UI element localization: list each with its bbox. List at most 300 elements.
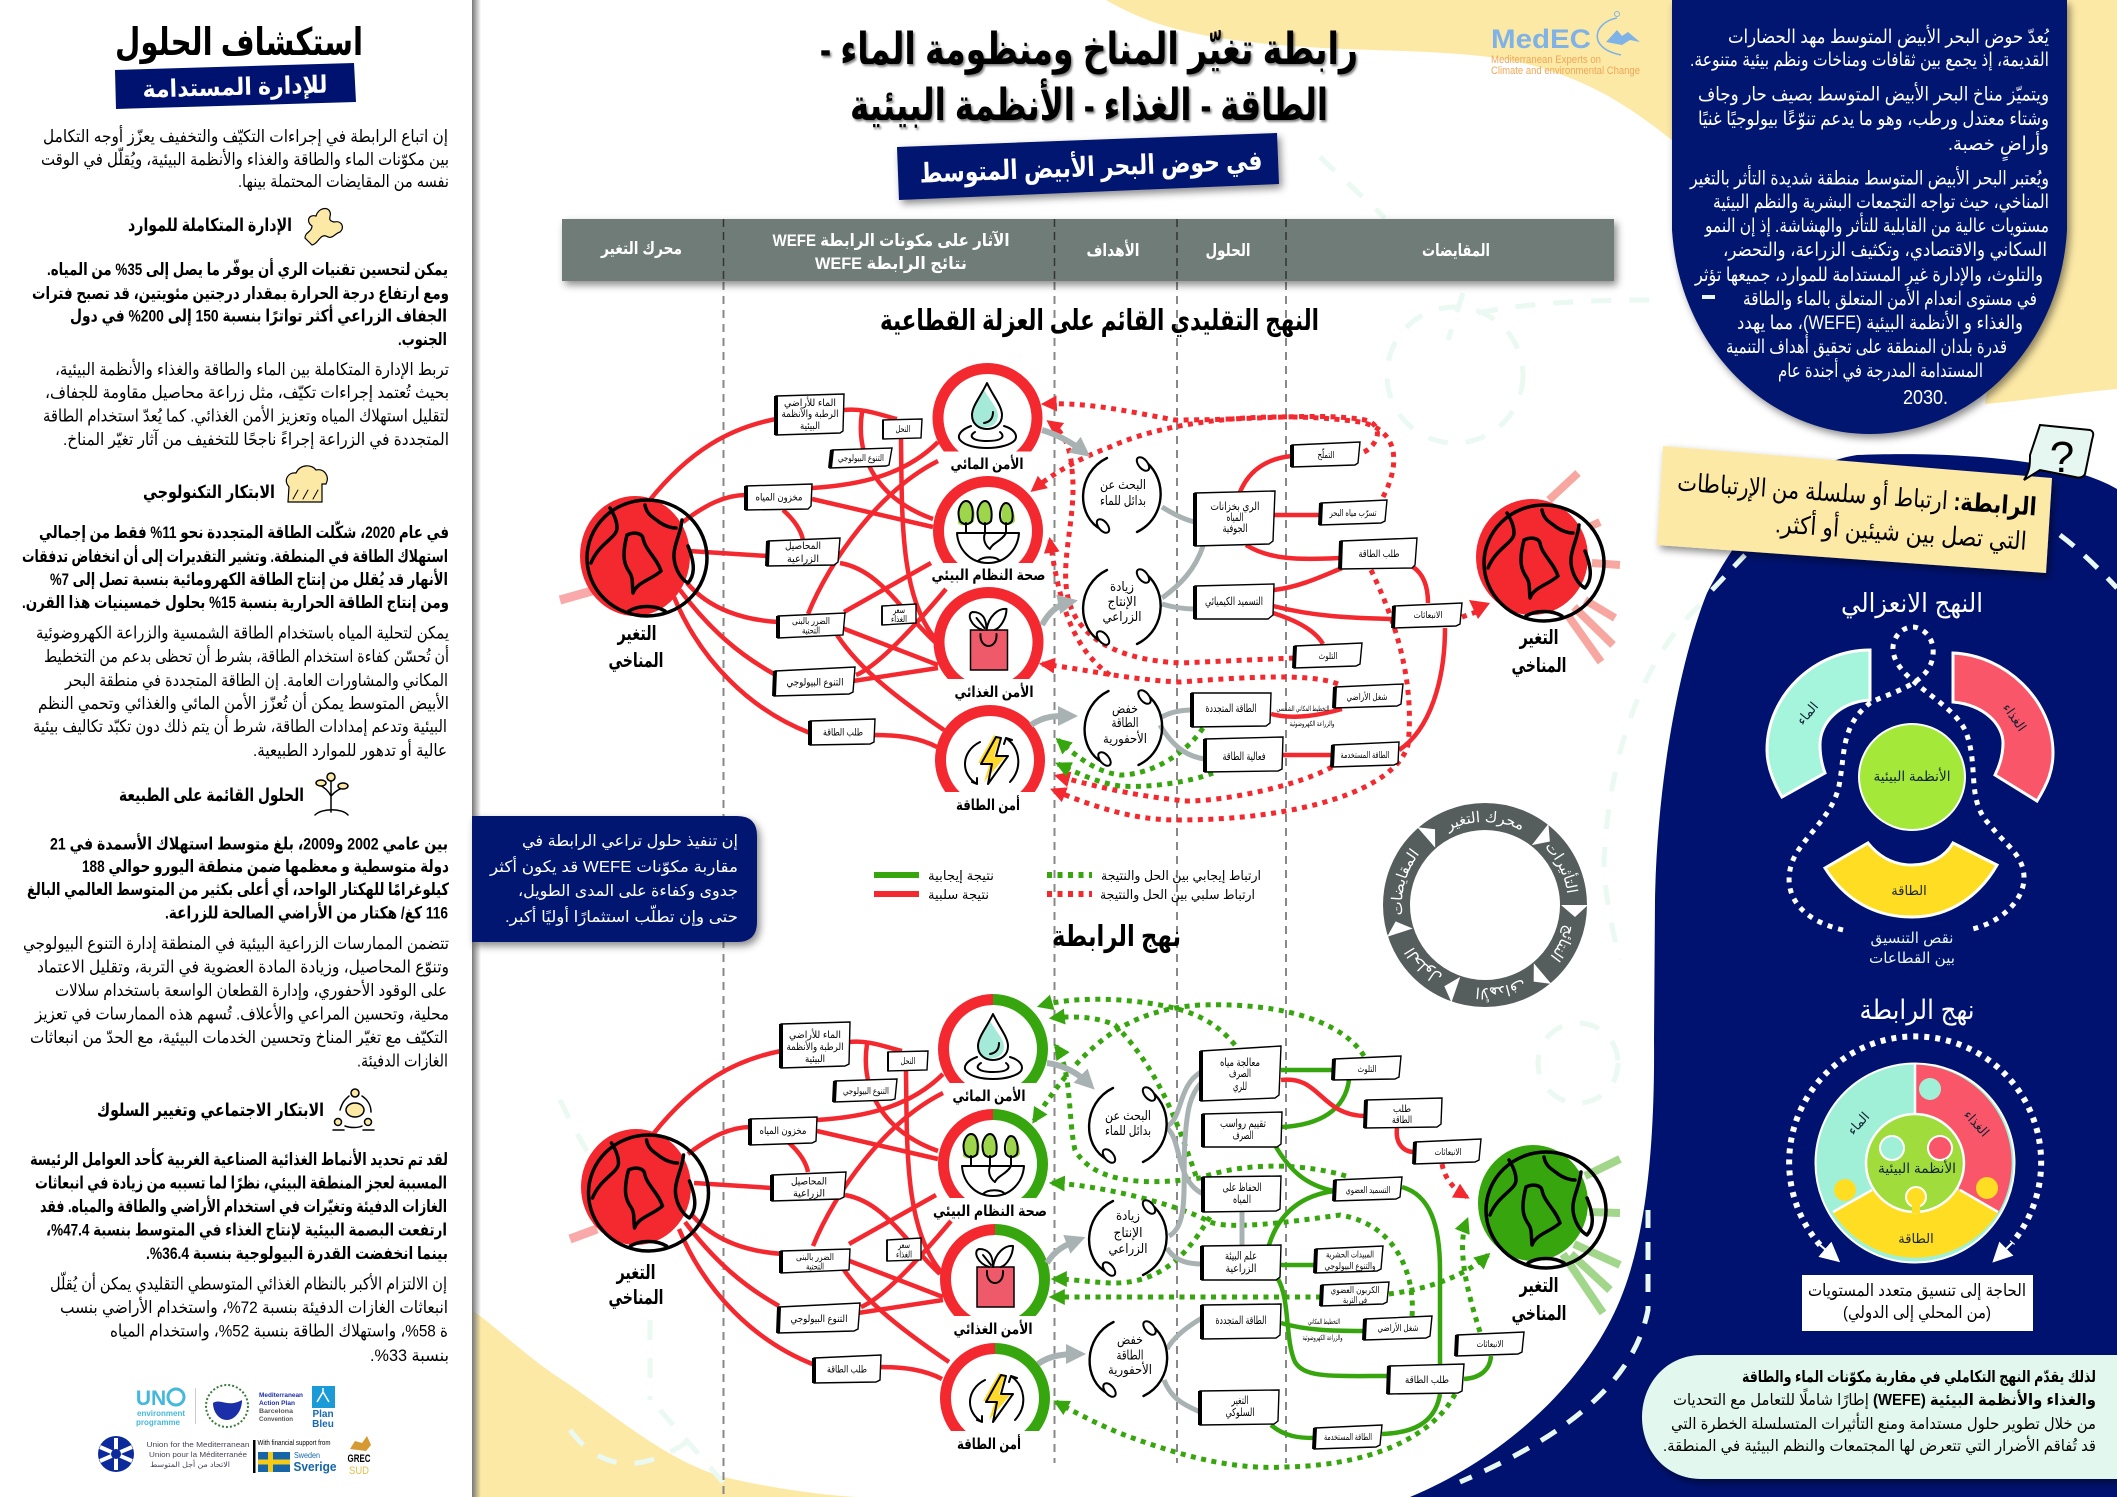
nexus: trade-off boxes: التلوث bbox=[1358, 1064, 1376, 1074]
text block: social innovation bbox=[30, 1148, 449, 1365]
panel: Mediterranean intro: يُعدّ حوض البحر الأبيض المتوسط مهد الحضارات bbox=[1728, 25, 2050, 48]
panel: conclusion: من خلال تطوير حلول مستدامة ومنع التأثيرات المتسلسلة الخطرة التي bbox=[1671, 1412, 2096, 1434]
text block: nature based solutions: التكيّف مع تغيّر المناخ وتحسين الخدمات البيئية، مع الحدّ من انبعاثات bbox=[30, 1028, 448, 1048]
diagram: nexus puzzle: الأنظمة البيئية bbox=[1878, 1159, 1956, 1176]
text block: integrated management: يمكن لتحسين تقنيات الري أن يوفّر ما يصل إلى 35% من المياه. bbox=[47, 258, 448, 280]
conventional: energy security bbox=[940, 710, 1040, 814]
conventional: impact boxes: الزراعية bbox=[787, 554, 819, 565]
nexus: trade-off boxes: طلب الطاقة bbox=[1405, 1375, 1449, 1386]
text block: nature based solutions bbox=[23, 834, 449, 1070]
text block: integrated management: المتجددة في الزراعة إجراءً ناجحًا للتخفيف من آثار تغيّر المناخ. bbox=[63, 428, 449, 450]
logo: Mediterranean Action Plan: Barcelona bbox=[259, 1408, 293, 1415]
text block: technological innovation: الأبيض المتوسط يمكن أن تُعزّز الأمن المائي والغذائي وتحمي النظم bbox=[38, 692, 449, 714]
conventional: trade-off boxes: التملّح bbox=[1318, 448, 1334, 460]
logo: Plan Bleu: Plan bbox=[312, 1409, 334, 1420]
text block: nature based solutions: كيلوغرامًا للهكتار الواحد، أي أعلى بكثير من المتوسط العالمي البالغ bbox=[27, 878, 449, 900]
conventional: ecosystem health bbox=[932, 482, 1046, 584]
heading: conventional approach: النهج التقليدي القائم على العزلة القطاعية bbox=[880, 305, 1319, 337]
title: الطاقة - الغذاء - الأنظمة البيئية bbox=[850, 78, 1328, 130]
nexus: solution boxes: الزراعية bbox=[1226, 1263, 1256, 1275]
nexus: trade-off boxes: التسميد العضوي bbox=[1346, 1185, 1390, 1195]
conventional: trade-off boxes: التلوث bbox=[1318, 651, 1338, 661]
diagram: nexus puzzle bbox=[1789, 1036, 2041, 1262]
header band bbox=[562, 219, 1614, 281]
cycle ring: الحلول bbox=[1404, 948, 1442, 982]
cycle ring bbox=[1383, 803, 1587, 1007]
header band: نتائج الرابطة WEFE bbox=[815, 254, 967, 274]
conventional: impact boxes: سعر bbox=[892, 605, 905, 615]
diagram: siloed approach: الطاقة bbox=[1891, 883, 1927, 898]
callout: multi-level coordination: (من المحلي إلى الدولي) bbox=[1843, 1303, 1991, 1323]
logo: MedEC: MedEC bbox=[1491, 24, 1591, 54]
nexus: impact boxes: التنوع البيولوجي bbox=[843, 1086, 889, 1096]
panel: conclusion bbox=[1642, 1355, 2117, 1479]
cycle ring: الأهداف bbox=[1476, 980, 1524, 1002]
diagram: siloed approach: الأنظمة البيئية bbox=[1874, 767, 1950, 784]
nexus: goal search for water alternatives: البحث عن bbox=[1105, 1108, 1151, 1124]
icon: question bubble: ? bbox=[2050, 433, 2074, 482]
panel: Mediterranean intro: مستويات عالية من القابلية للتأثر والهشاشة. إذ إن النمو bbox=[1704, 212, 2049, 238]
text block: technological innovation: عالية أو تدهور للموارد الطبيعية. bbox=[253, 739, 447, 760]
intro paragraph: إن اتباع الرابطة في إجراءات التكيّف والتخفيف يعزّز أوجه التكامل bbox=[43, 125, 448, 147]
nexus: trade-off boxes: الانبعاثات bbox=[1434, 1147, 1462, 1157]
nexus: impact boxes: طلب الطاقة bbox=[827, 1364, 867, 1376]
conventional: ecosystem health: صحة النظام البيئي bbox=[932, 567, 1046, 584]
conventional: goal reduce fossil energy: خفض bbox=[1112, 701, 1138, 717]
logo: Union for the Mediterranean: Union pour la Méditerranée bbox=[149, 1450, 247, 1459]
callout: nexus solutions: جدوى وكفاءة على المدى الطويل، bbox=[518, 883, 738, 901]
intro paragraph: نفسه من المقايضات المحتملة بينها. bbox=[238, 172, 449, 192]
heading: nexus approach: نهج الرابطة bbox=[1052, 921, 1181, 953]
text block: integrated management: بحيث تُعتمد إجراءات تكيّف، مثل زراعة محاصيل مقاومة للجفاف، bbox=[45, 383, 449, 402]
legend: ارتباط سلبي بين الحل والنتيجة bbox=[1100, 887, 1255, 903]
panel: Mediterranean intro: ويُعتبر البحر الأبيض المتوسط منطقة شديدة التأثر بالتغير bbox=[1689, 164, 2049, 190]
nexus: trade-off boxes: الكربون العضوي bbox=[1330, 1285, 1380, 1295]
text block: social innovation: إن الالتزام الأكبر بالنظام الغذائي المتوسطي التقليدي يمكن أن يُقلّل bbox=[50, 1271, 447, 1294]
conventional: left globe bbox=[560, 496, 707, 673]
nexus: impact boxes: الماء للأراضي bbox=[789, 1028, 841, 1041]
header band: الآثار على مكونات الرابطة WEFE bbox=[772, 230, 1010, 251]
logo: MedEC: Climate and environmental Change bbox=[1491, 65, 1640, 77]
intro paragraph: بين مكوّنات الماء والطاقة والغذاء والأنظمة البيئية، ويُقلّل في الوقت bbox=[41, 146, 449, 170]
text block: social innovation: انبعاثات الغازات الدفيئة بنسبة 72%، واستخدام الأراضي بنسب bbox=[60, 1297, 448, 1318]
logo: UN environment: environment bbox=[137, 1409, 185, 1418]
caption: lack of coordination: بين القطاعات bbox=[1869, 950, 1955, 967]
conventional: left globe: المناخي bbox=[608, 650, 664, 673]
nexus: left globe: المناخي bbox=[608, 1287, 664, 1310]
text block: technological innovation: يمكن لتحلية المياه باستخدام الطاقة الشمسية والزراعة الكهروضوئية bbox=[36, 624, 449, 644]
nexus: goal increase agricultural production: الزراعي bbox=[1108, 1241, 1148, 1257]
conventional: gray arrows bbox=[1031, 430, 1084, 725]
logo: Mediterranean Action Plan: Action Plan bbox=[259, 1400, 295, 1407]
nexus: solution boxes: الصرف bbox=[1232, 1130, 1254, 1142]
panel: Mediterranean intro: قدرة بلدان المنطقة على تحقيق أهداف التنمية bbox=[1726, 334, 2007, 358]
nexus: solution boxes: الصرف bbox=[1229, 1068, 1251, 1080]
nexus: left globe bbox=[570, 1129, 708, 1310]
conventional: goal search for water alternatives bbox=[1083, 455, 1161, 535]
panel: Mediterranean intro: المناخي، حيث تواجه التجمعات البشرية والنظم البيئية bbox=[1713, 192, 2049, 213]
heading: explore solutions: استكشاف الحلول bbox=[115, 22, 363, 64]
nexus: impact boxes: سعر bbox=[897, 1240, 910, 1250]
nexus: impact boxes: التحتية bbox=[806, 1262, 824, 1272]
text block: technological innovation: أن تُحسّن كفاءة استخدام الطاقة، بشرط أن تحظى بدعم من التخطيط bbox=[44, 645, 449, 667]
conventional: goal increase agricultural production bbox=[1083, 567, 1161, 647]
panel: Mediterranean intro: وأراضٍ خصبة. bbox=[1948, 131, 2049, 161]
nexus: gray goal to solution links bbox=[1164, 1072, 1242, 1412]
callout: nexus definition: الرابطة: ارتباط أو سلسلة من الإرتباطات bbox=[1676, 464, 2038, 523]
conventional: trade-off boxes: طلب الطاقة bbox=[1358, 549, 1400, 560]
nexus: impact boxes bbox=[750, 1022, 928, 1383]
heading: social innovation: الابتكار الاجتماعي وتغيير السلوك bbox=[97, 1100, 324, 1121]
panel: Mediterranean intro bbox=[1672, 0, 2067, 434]
heading: nature based solutions: الحلول القائمة على الطبيعة bbox=[119, 785, 304, 806]
nexus: negative trade-off links bbox=[1281, 1080, 1414, 1152]
logo: Union for the Mediterranean: الاتحاد من أجل المتوسط bbox=[150, 1459, 230, 1469]
conventional: left globe: التغير bbox=[617, 623, 656, 645]
nexus: trade-off boxes: المبيدات الحشرية bbox=[1326, 1250, 1374, 1260]
conventional: solution boxes bbox=[1192, 491, 1283, 772]
text block: integrated management bbox=[32, 258, 449, 450]
nexus: impact boxes: البيئية bbox=[805, 1054, 825, 1065]
header band: محرك التغير bbox=[600, 239, 682, 259]
heading: integrated resource management: الإدارة المتكاملة للموارد bbox=[128, 215, 292, 236]
cycle ring: النتائج bbox=[1550, 926, 1572, 962]
conventional: impact boxes: مخزون المياه bbox=[756, 492, 802, 504]
nexus: trade-off boxes: والتنوع البيولوجي bbox=[1324, 1261, 1376, 1271]
conventional: trade-off boxes bbox=[1292, 442, 1462, 767]
nexus: impact boxes: المحاصيل bbox=[791, 1176, 827, 1188]
conventional: trade-off boxes: تسرّب مياه البحر bbox=[1329, 508, 1377, 518]
text block: technological innovation: استهلاك الطاقة في المنطقة. وتشير التقديرات إلى أن انخفاض تدفقات bbox=[22, 545, 448, 567]
conventional: food security: الأمن الغذائي bbox=[954, 683, 1034, 701]
logo: Sweden Sverige: Sverige bbox=[294, 1459, 336, 1474]
text block: social innovation: لقد تم تحديد الأنماط الغذائية الصناعية الغربية كأحد العوامل الرئيسة bbox=[30, 1148, 448, 1170]
callout: nexus solutions: إن تنفيذ حلول تراعي الرابطة في bbox=[522, 833, 738, 851]
nexus: impact boxes: التنوع البيولوجي bbox=[790, 1314, 848, 1325]
nexus: right globe: المناخي bbox=[1512, 1303, 1566, 1326]
nexus: trade-off links bbox=[1269, 1070, 1491, 1438]
nexus: energy security bbox=[946, 1348, 1044, 1453]
title bbox=[820, 25, 1358, 130]
nexus: impact boxes: النحل bbox=[900, 1056, 916, 1066]
text block: social innovation: ة 58%، واستهلاك الطاقة بنسبة 52%، واستخدام المياه bbox=[110, 1322, 448, 1342]
nexus: solution boxes: علم البيئة bbox=[1225, 1250, 1257, 1262]
nexus: trade-off boxes: طلب bbox=[1393, 1104, 1411, 1115]
conventional: trade-off boxes: الانبعاثات bbox=[1414, 610, 1442, 620]
nexus: goal reduce fossil energy: الطاقة bbox=[1116, 1348, 1144, 1362]
nexus: solution boxes: الطاقة المتجددة bbox=[1216, 1315, 1266, 1327]
panel: left text column bbox=[0, 0, 481, 1497]
logo: MedEC bbox=[1491, 12, 1640, 77]
nexus: trade-off boxes: الانبعاثات bbox=[1476, 1339, 1504, 1349]
nexus: water security: الأمن المائي bbox=[952, 1087, 1026, 1105]
conventional: small note on spatial planning: التخطيط المكاني الشمسي bbox=[1276, 705, 1330, 713]
cycle ring: المقايضات bbox=[1390, 848, 1419, 914]
text block: nature based solutions: دولة متوسطية و معظمها ضمن منطقة اليورو حوالي 188 bbox=[82, 857, 449, 877]
icon: people cycle bbox=[333, 1089, 374, 1130]
legend: ارتباط إيجابي بين الحل والنتيجة bbox=[1101, 868, 1261, 884]
conventional: goal reduce fossil energy: الطاقة bbox=[1112, 715, 1138, 730]
nexus: impact boxes: الضرر بالبنى bbox=[796, 1252, 834, 1262]
nexus: ecosystem health: صحة النظام البيئي bbox=[933, 1203, 1047, 1220]
text block: nature based solutions: تتضمن الممارسات الزراعية البيئية في المنطقة إدارة التنوع البيولوجي bbox=[23, 934, 449, 954]
text block: nature based solutions: وتنوّع المحاصيل، وزيادة المادة العضوية في التربة، وتقليل الاعتماد bbox=[37, 958, 449, 978]
nexus: trade-off boxes bbox=[1314, 1056, 1524, 1449]
text block: nature based solutions: بين عامي 2002 و2009، بلغ متوسط استهلاك الأسمدة في 21 bbox=[50, 834, 448, 854]
diagram: nexus puzzle: الغذاء bbox=[1961, 1107, 1992, 1140]
conventional: goal increase agricultural production: زيادة bbox=[1110, 579, 1134, 595]
conventional: water security bbox=[938, 368, 1037, 473]
diagram: siloed approach bbox=[1767, 627, 2053, 930]
conventional: right globe bbox=[1476, 473, 1620, 678]
nexus: solution boxes: الحفاظ على bbox=[1222, 1182, 1262, 1194]
text block: integrated management: لتقليل استهلاك المياه وتعزيز الأمن الغذائي. كما يُعدّ استخدام الطاقة bbox=[43, 406, 449, 426]
callout: nexus solutions: حتى وإن تطلّب استثمارًا أوليًا أكبر. bbox=[505, 903, 738, 927]
logo: Union for the Mediterranean: Union for the Mediterranean bbox=[146, 1440, 250, 1449]
callout: nexus solutions bbox=[472, 816, 757, 942]
logo: Sweden Sverige bbox=[253, 1440, 336, 1474]
subtitle banner: في حوض البحر الأبيض المتوسط bbox=[919, 143, 1263, 190]
logo: Union for the Mediterranean bbox=[98, 1436, 250, 1472]
nexus: gray arrows bbox=[1038, 1063, 1089, 1364]
icon: sprout bbox=[315, 773, 348, 815]
conventional: solution boxes: الطاقة المتجددة bbox=[1206, 703, 1256, 715]
callout: multi-level coordination bbox=[1802, 1275, 2033, 1331]
text block: nature based solutions: 116 كغ/ هكتار من الأراضي الصالحة للزراعة. bbox=[165, 902, 448, 924]
cycle ring: التأثيرات bbox=[1546, 845, 1579, 893]
conventional: goal search for water alternatives: بدائل للماء bbox=[1100, 493, 1146, 508]
diagram: nexus puzzle: الماء bbox=[1844, 1109, 1872, 1138]
conventional: small note on spatial planning bbox=[1276, 705, 1334, 728]
conventional: gray goal to solution links bbox=[1160, 507, 1205, 759]
text block: technological innovation: الأنهار قد يُقلل من إنتاج الطاقة الكهرومائية بنسبة تصل إلى 7% bbox=[50, 569, 448, 590]
nexus: positive dotted links bbox=[1034, 999, 1488, 1467]
conventional: trade-off boxes: شغل الأراضي bbox=[1346, 691, 1388, 702]
text block: social innovation: بينما انخفضت القدرة البيولوجية بنسبة 36.4%. bbox=[146, 1244, 448, 1264]
logo: UN environment bbox=[136, 1387, 196, 1427]
diagram: siloed approach: الماء bbox=[1794, 699, 1821, 728]
banner: sustainable management bbox=[115, 63, 356, 109]
nexus: solution boxes: التغير bbox=[1231, 1395, 1248, 1407]
heading: technological innovation: الابتكار التكنولوجي bbox=[143, 482, 275, 503]
nexus: goal reduce fossil energy: خفض bbox=[1117, 1332, 1143, 1348]
nexus: small note on spatial planning: التخطيط المكاني bbox=[1308, 1318, 1340, 1326]
conventional: solution boxes: الري بخزانات bbox=[1210, 501, 1260, 513]
conventional: impact boxes: الضرر بالبنى bbox=[792, 616, 830, 626]
logo: UN environment: programme bbox=[136, 1418, 181, 1427]
callout: nexus definition bbox=[1657, 446, 2052, 573]
diagram: nexus puzzle: الطاقة bbox=[1898, 1231, 1934, 1246]
conventional: small note on spatial planning: والزراعة الكهروضوئية bbox=[1290, 720, 1334, 728]
text block: technological innovation: في عام 2020، شكّلت الطاقة المتجددة نحو 11% فقط من إجمالي bbox=[39, 520, 449, 543]
conventional: energy security: أمن الطاقة bbox=[956, 795, 1020, 814]
logo: Mediterranean Action Plan: Convention bbox=[259, 1416, 293, 1423]
nexus: energy security: أمن الطاقة bbox=[957, 1434, 1021, 1453]
nexus: goal increase agricultural production bbox=[1089, 1198, 1167, 1278]
nexus: solution boxes: المياه bbox=[1233, 1194, 1251, 1206]
conventional: right globe: التغير bbox=[1519, 627, 1558, 649]
conventional: trade-off links bbox=[1240, 456, 1445, 755]
logo: Mediterranean Action Plan bbox=[206, 1385, 303, 1427]
conventional: goal increase agricultural production: الزراعي bbox=[1102, 609, 1142, 625]
caption: lack of coordination bbox=[1869, 930, 1955, 967]
panel: conclusion: قد تُفاقم الأضرار التي تتعرض لها المجتمعات والنظم البيئية في المنطقة. bbox=[1663, 1435, 2096, 1456]
conventional: impact boxes: التنوع البيولوجي bbox=[786, 678, 844, 688]
conventional: impact boxes: التحتية bbox=[802, 626, 820, 636]
text block: technological innovation bbox=[22, 520, 449, 760]
conventional: impact boxes: التنوع البيولوجي bbox=[838, 453, 884, 463]
nexus: goal reduce fossil energy bbox=[1090, 1319, 1167, 1399]
conventional: right globe: المناخي bbox=[1512, 655, 1566, 678]
icon: puzzle piece bbox=[305, 209, 342, 245]
logo: GREC SUD: SUD bbox=[349, 1465, 369, 1477]
panel: conclusion: والغذاء والأنظمة البيئية (WEFE) إطارًا شاملًا للتعامل مع التحديات bbox=[1673, 1387, 2096, 1410]
nexus: negative dotted arrow bbox=[1442, 1164, 1467, 1197]
nexus: trade-off boxes: الطاقة المستخدمة bbox=[1324, 1432, 1372, 1442]
nexus: small note on spatial planning bbox=[1302, 1318, 1342, 1342]
conventional: solution boxes: فعالية الطاقة bbox=[1222, 751, 1266, 763]
nexus: impact boxes: الزراعية bbox=[793, 1188, 825, 1200]
nexus: solution boxes: السلوكي bbox=[1226, 1407, 1254, 1419]
nexus: water security bbox=[944, 1000, 1042, 1105]
logo: MedEC: Mediterranean Experts on bbox=[1491, 54, 1601, 66]
text block: social innovation: الغازات الدفيئة وتغيّرات في استخدام الأراضي والطاقة والمياه. فقد bbox=[40, 1196, 447, 1217]
subtitle banner bbox=[897, 133, 1279, 200]
cycle ring: محرك التغير bbox=[1448, 810, 1522, 834]
nexus: right globe bbox=[1478, 1145, 1620, 1326]
conventional: goal reduce fossil energy: الأحفورية bbox=[1103, 730, 1147, 747]
conventional: impact boxes: النحل bbox=[896, 424, 910, 434]
nexus: trade-off boxes: الطاقة bbox=[1392, 1115, 1412, 1126]
text block: social innovation: بنسبة 33%. bbox=[370, 1346, 449, 1365]
logo: GREC SUD bbox=[348, 1436, 371, 1477]
banner: sustainable management: للإدارة المستدامة bbox=[142, 72, 328, 103]
conventional: solution boxes: التسميد الكيميائي bbox=[1205, 596, 1263, 608]
nexus: food security bbox=[946, 1230, 1044, 1338]
conventional: negative dotted links bbox=[1033, 404, 1476, 820]
icon: question bubble bbox=[2024, 425, 2093, 482]
nexus: small note on spatial planning: والزراعة الكهروضوئية bbox=[1302, 1334, 1342, 1342]
header band: المقايضات bbox=[1422, 241, 1490, 260]
nexus: trade-off boxes: في التربة bbox=[1343, 1295, 1367, 1305]
nexus: goal search for water alternatives: بدائل للماء bbox=[1105, 1123, 1151, 1138]
conventional: impact boxes: البيئية bbox=[800, 421, 820, 432]
header band: الحلول bbox=[1206, 241, 1250, 261]
nexus: red impact links bbox=[654, 1042, 951, 1379]
heading: siloed approach: النهج الانعزالي bbox=[1841, 588, 1983, 619]
conventional: impact boxes: الماء للأراضي bbox=[784, 396, 836, 409]
conventional: impact boxes: الغذاء bbox=[891, 614, 907, 624]
conventional: positive dotted links bbox=[1058, 728, 1213, 786]
text block: integrated management: الجفاف الزراعي أكثر تواترًا بنسبة 150 إلى 200% في دول bbox=[70, 304, 447, 326]
logo: Plan Bleu bbox=[312, 1386, 335, 1430]
conventional: water security: الأمن المائي bbox=[950, 455, 1024, 473]
nexus: impact boxes: مخزون المياه bbox=[760, 1126, 806, 1137]
logo: Mediterranean Action Plan: Mediterranean bbox=[259, 1392, 303, 1399]
legend: نتيجة إيجابية bbox=[928, 868, 994, 883]
conventional: impact boxes: المحاصيل bbox=[785, 541, 821, 552]
nexus: impact boxes: الرطبة والأنظمة bbox=[786, 1040, 844, 1053]
caption: lack of coordination: نقص التنسيق bbox=[1870, 930, 1954, 947]
header band: الأهداف bbox=[1086, 240, 1140, 260]
logo: Plan Bleu: Bleu bbox=[312, 1419, 334, 1430]
text block: nature based solutions: على الوقود الأحفوري، وإدارة القطعان الواسعة باستخدام سلالات bbox=[55, 980, 447, 1001]
text block: integrated management: الجنوب. bbox=[398, 330, 447, 350]
text block: nature based solutions: محلية، وتحسين المراعي والأعلاف. تُسهم هذه الممارسات في تعزيز bbox=[34, 1004, 449, 1024]
conventional: trade-off boxes: الطاقة المستخدمة bbox=[1340, 750, 1390, 760]
text block: technological innovation: البيئية وتدعم إمدادات الطاقة، شرط أن يتم ذلك دون تكبّد تكاليف بيئية bbox=[33, 715, 447, 737]
partner logos bbox=[98, 1385, 371, 1477]
logo: Sweden Sverige: Sweden bbox=[294, 1451, 320, 1460]
panel: Mediterranean intro: والتلوث، والإدارة غير المستدامة للموارد، جميعها تؤثر bbox=[1694, 265, 2043, 286]
nexus: solution boxes: معالجة مياه bbox=[1220, 1057, 1260, 1069]
logo: UN environment: UN bbox=[136, 1387, 166, 1410]
conventional: goal reduce fossil energy bbox=[1085, 688, 1162, 768]
nexus: impact boxes: الغذاء bbox=[896, 1250, 912, 1260]
panel: Mediterranean intro: وشتاء معتدل ورطب، وهو ما يدعم تنوّعًا بيولوجيًا غنيًا bbox=[1698, 109, 2049, 130]
callout: nexus definition: التي تصل بين شيئين أو أكثر. bbox=[1774, 506, 2028, 557]
conventional: food security bbox=[939, 592, 1038, 701]
icon: cloud and panel bbox=[286, 466, 327, 502]
text block: integrated management: ومع ارتفاع درجة الحرارة بمقدار درجتين مئويتين، قد تصبح فترات bbox=[32, 284, 449, 304]
nexus: goal search for water alternatives bbox=[1089, 1085, 1167, 1165]
arrow: emissions to climate bbox=[1469, 600, 1490, 619]
heading: nexus approach (right): نهج الرابطة bbox=[1860, 995, 1974, 1026]
conventional: red impact links bbox=[649, 410, 946, 747]
nexus: goal increase agricultural production: الإنتاج bbox=[1114, 1225, 1142, 1241]
conventional: impact boxes bbox=[746, 394, 922, 745]
conventional: goal increase agricultural production: الإنتاج bbox=[1108, 594, 1136, 610]
panel: Mediterranean intro: ويتميّز مناخ البحر الأبيض المتوسط بصيف حار وجاف bbox=[1698, 82, 2049, 106]
logo: Sweden Sverige: With financial support from bbox=[258, 1440, 331, 1447]
panel: Mediterranean intro: في مستوى انعدام الأمن المتعلق بالماء والطاقة bbox=[1743, 287, 2037, 310]
nexus: solution boxes bbox=[1200, 1046, 1282, 1425]
decorative white dashes on navy bbox=[1460, 535, 2117, 1482]
nexus: food security: الأمن الغذائي bbox=[954, 1320, 1032, 1338]
text block: technological innovation: المكاني والمشاورات العامة. إن الطاقة المتجددة في منطقة البحر bbox=[64, 671, 448, 691]
panel: Mediterranean intro: القديمة، إذ يجمع بين ثقافات ومناخات ونظم بيئية متنوعة. bbox=[1690, 50, 2049, 72]
panel: navy right background bbox=[1410, 454, 2117, 1497]
diagram: siloed approach: الغذاء bbox=[2000, 701, 2029, 734]
legend: نتيجة سلبية bbox=[928, 887, 989, 902]
panel: Mediterranean intro: المستدامة المدرجة في أجندة عام bbox=[1778, 358, 1983, 382]
nexus: ecosystem health bbox=[933, 1114, 1047, 1220]
conventional: impact boxes: الرطبة والأنظمة bbox=[782, 407, 838, 420]
nexus: trade-off boxes: شغل الأراضي bbox=[1378, 1322, 1418, 1333]
panel: Mediterranean intro: والغذاء و الأنظمة البيئية (WEFE)، مما يهدد bbox=[1737, 311, 2023, 334]
callout: multi-level coordination: الحاجة إلى تنسيق متعدد المستويات bbox=[1808, 1281, 2026, 1300]
nexus: goal reduce fossil energy: الأحفورية bbox=[1108, 1361, 1152, 1378]
conventional: solution boxes: الجوفية bbox=[1222, 523, 1248, 535]
legend bbox=[874, 868, 1261, 903]
text block: social innovation: ارتفعت البصمة البيئية لإنتاج الغذاء في المتوسط بنسبة 47.4%، bbox=[46, 1220, 447, 1240]
nexus: solution boxes: للري bbox=[1233, 1081, 1247, 1093]
panel: Mediterranean intro: .2030 bbox=[1903, 387, 1948, 409]
text block: integrated management: تربط الإدارة المتكاملة بين الماء والطاقة والغذاء والأنظمة البيئية، bbox=[55, 359, 449, 379]
text block: nature based solutions: الغازات الدفيئة. bbox=[357, 1052, 448, 1070]
text block: technological innovation: ومن إنتاج الطاقة الحرارية بنسبة 15% بحلول خمسينيات هذا القرن. bbox=[22, 593, 449, 613]
callout: nexus solutions: مقاربة مكوّنات WEFE قد يكون أكثر bbox=[489, 856, 738, 877]
logo: GREC SUD: GREC bbox=[348, 1453, 371, 1465]
nexus: right globe: التغير bbox=[1519, 1275, 1558, 1297]
panel: Mediterranean intro: السكاني والاقتصادي، وتكثيف الزراعة، والتحضر، bbox=[1723, 240, 2047, 261]
conventional: impact boxes: طلب الطاقة bbox=[823, 728, 863, 738]
nexus: goal increase agricultural production: زيادة bbox=[1116, 1208, 1140, 1224]
column dividers bbox=[724, 282, 1286, 1497]
title: رابطة تغيّر المناخ ومنظومة الماء - bbox=[820, 25, 1358, 75]
nexus: left globe: التغير bbox=[616, 1262, 656, 1284]
conventional: solution boxes: المياه bbox=[1226, 512, 1244, 524]
